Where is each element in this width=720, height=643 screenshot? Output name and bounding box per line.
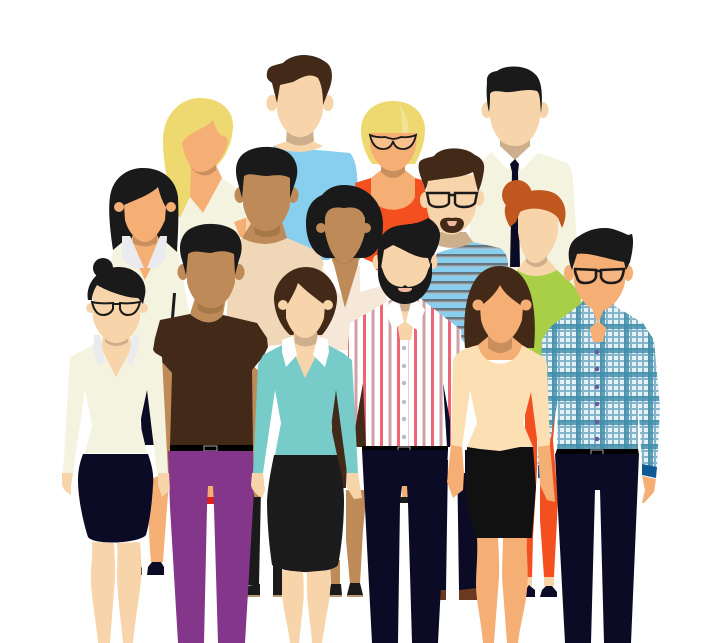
- torso: [451, 345, 550, 451]
- person: bearded man in striped shirt (front): [348, 218, 465, 643]
- belt and pants: [362, 446, 448, 451]
- legs: red-haired woman: [520, 392, 537, 577]
- background legs and shoes: [139, 385, 558, 600]
- pants: [168, 451, 254, 643]
- person: blonde woman with glasses and orange top: [355, 101, 436, 280]
- skirt: [267, 455, 344, 572]
- icon: glasses: [92, 302, 140, 315]
- belt: [170, 445, 253, 451]
- plaid collar: [581, 295, 614, 330]
- hair: [378, 218, 440, 268]
- hands: [251, 473, 265, 498]
- person: man in plaid shirt: [537, 228, 660, 643]
- person: man with tie: [470, 66, 580, 290]
- person: man in brown t-shirt: [153, 224, 268, 643]
- crotch gap detail: [207, 486, 215, 497]
- blouse: [253, 345, 358, 473]
- person: woman with long brown hair: [447, 266, 555, 643]
- person: woman with black hair: [100, 168, 192, 350]
- hair: [464, 266, 535, 348]
- hair back: [109, 168, 178, 252]
- person: woman with bun and cream blouse: [62, 258, 170, 643]
- neck: [190, 298, 226, 322]
- legs: [282, 570, 330, 643]
- arms: [155, 362, 172, 480]
- person: man in blue t-shirt: [266, 55, 362, 260]
- tee: [153, 314, 268, 447]
- legs: [476, 538, 528, 643]
- legs: woman with black hair: [141, 390, 172, 445]
- goatee: [440, 218, 464, 233]
- legs: afro woman: [331, 390, 350, 488]
- skirt: [78, 454, 153, 543]
- neck: [101, 330, 132, 378]
- belt and pants: [555, 449, 639, 455]
- person: woman with afro hair: [306, 185, 390, 350]
- right cuff: [456, 443, 465, 473]
- arms and hands: [447, 445, 464, 498]
- skirt: [465, 447, 536, 538]
- person: red-haired woman in green top: [502, 180, 581, 365]
- person: dark-skinned man in beige t-shirt: [225, 147, 332, 350]
- hands: [62, 473, 73, 495]
- legs: [91, 542, 141, 643]
- person: woman in teal blouse: [251, 267, 362, 643]
- bun: [93, 258, 113, 278]
- person: bearded man in striped shirt: [419, 148, 510, 345]
- legs: man with striped shirt: [457, 450, 478, 590]
- person: blonde woman: [163, 98, 252, 260]
- neck: [478, 335, 522, 360]
- cuff and hand: [642, 464, 657, 478]
- buttons: [595, 350, 599, 441]
- beard: [378, 262, 432, 304]
- icon: square glasses: [427, 193, 477, 207]
- icon: cat-eye glasses: [370, 135, 416, 149]
- legs: dark-skinned man: [246, 490, 261, 585]
- icon: glasses: [575, 269, 624, 283]
- hair back: [274, 267, 337, 335]
- blouse: [63, 345, 168, 473]
